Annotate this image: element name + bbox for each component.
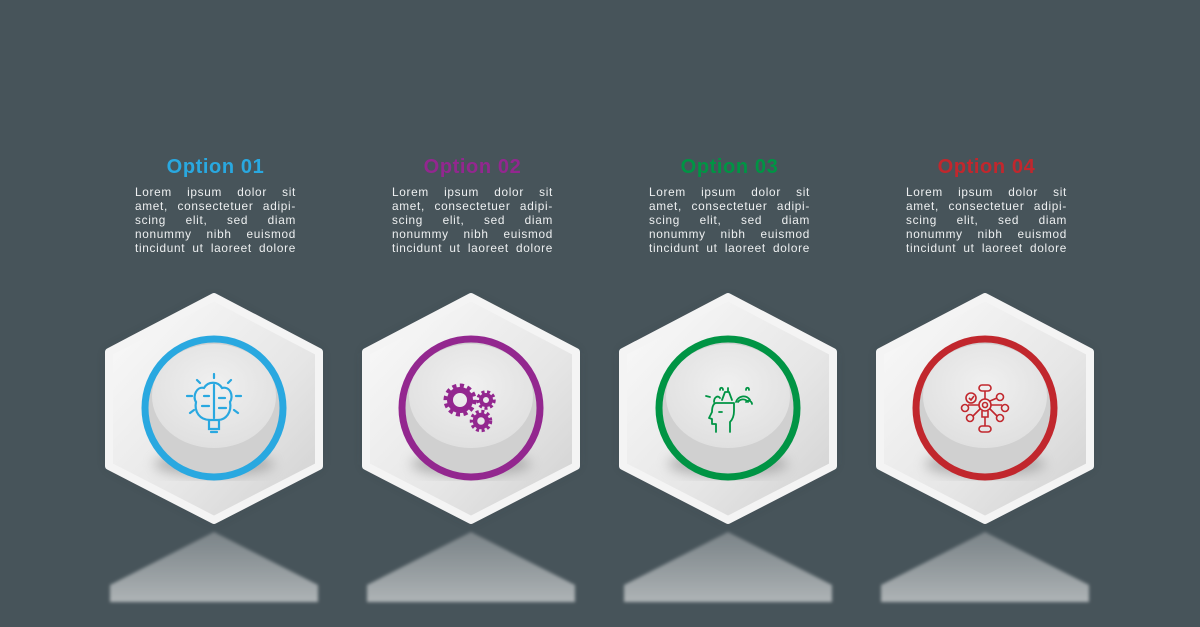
panel: option 01 hexagon: [109, 297, 319, 602]
text block: option 04: amet, consectetuer adipi-: [906, 199, 1067, 213]
text block: option 01: scing elit, sed diam: [135, 213, 296, 227]
text block: option 01: Option 01: [167, 156, 264, 178]
text block: option 03: scing elit, sed diam: [649, 213, 810, 227]
icon: brain bulb: [187, 374, 241, 432]
icon: head with ideas: [706, 388, 752, 432]
text block: option 04: [906, 156, 1067, 255]
text block: option 03: [649, 156, 810, 255]
text block: option 04: Lorem ipsum dolor sit: [906, 185, 1067, 199]
text block: option 02: scing elit, sed diam: [392, 213, 553, 227]
text block: option 02: tincidunt ut laoreet dolore: [392, 241, 553, 255]
text block: option 04: tincidunt ut laoreet dolore: [906, 241, 1067, 255]
text block: option 04: Option 04: [938, 156, 1035, 178]
text block: option 01: tincidunt ut laoreet dolore: [135, 241, 296, 255]
icon: idea network: [962, 385, 1008, 432]
text block: option 01: amet, consectetuer adipi-: [135, 199, 296, 213]
panel: option 02 hexagon: [366, 297, 576, 602]
text block: option 03: nonummy nibh euismod: [649, 227, 810, 241]
text block: option 03: amet, consectetuer adipi-: [649, 199, 810, 213]
text block: option 03: tincidunt ut laoreet dolore: [649, 241, 810, 255]
icon: gears: [446, 386, 494, 430]
text block: option 03: Lorem ipsum dolor sit: [649, 185, 810, 199]
panel: option 03 hexagon: [623, 297, 833, 602]
text block: option 02: [392, 156, 553, 255]
text block: option 01: nonummy nibh euismod: [135, 227, 296, 241]
text block: option 01: Lorem ipsum dolor sit: [135, 185, 296, 199]
text block: option 04: scing elit, sed diam: [906, 213, 1067, 227]
panel: option 04 hexagon: [880, 297, 1090, 602]
text block: option 04: nonummy nibh euismod: [906, 227, 1067, 241]
text block: option 02: amet, consectetuer adipi-: [392, 199, 553, 213]
text block: option 02: Lorem ipsum dolor sit: [392, 185, 553, 199]
text block: option 02: Option 02: [424, 156, 521, 178]
text block: option 02: nonummy nibh euismod: [392, 227, 553, 241]
text block: option 03: Option 03: [681, 156, 778, 178]
text block: option 01: [135, 156, 296, 255]
